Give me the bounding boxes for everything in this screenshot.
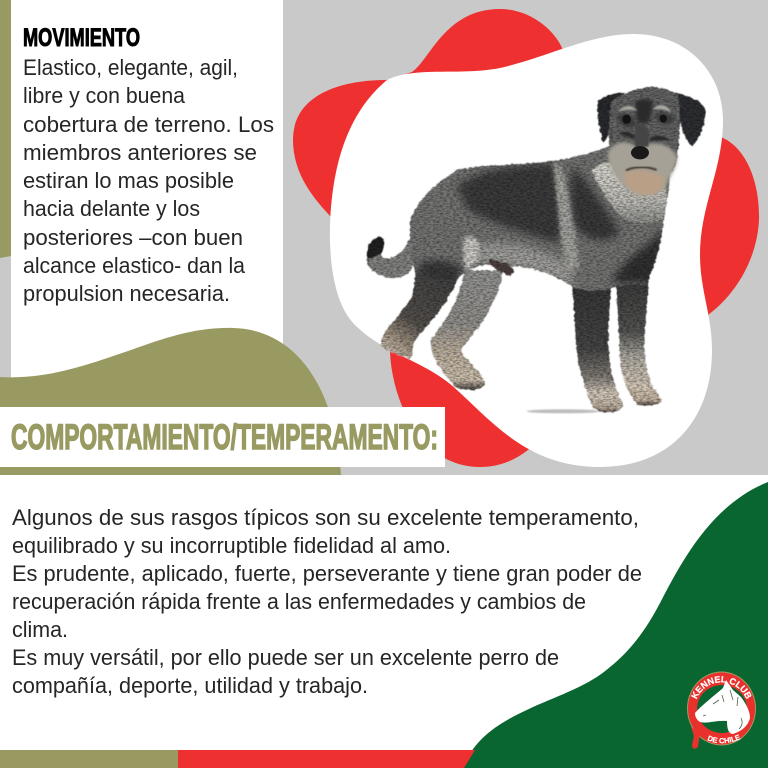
cheek dark bands [618,132,670,141]
belly mid tone [480,242,573,287]
tail tip [367,237,384,258]
temperament text block: clima. [12,617,68,642]
dog fur group [366,87,706,412]
private part [488,260,514,276]
bottom olive bar [0,750,178,768]
movimiento text block: propulsion necesaria. [23,281,230,306]
brows [618,105,671,113]
temperament text block: Es muy versátil, por ello puede ser un excelente perro de [12,645,559,670]
tail [366,230,416,278]
hip light patch [463,236,482,272]
green corner shape [463,482,768,768]
near hind leg [381,260,462,359]
muzzle bridge [635,124,649,147]
movimiento text block [23,55,274,306]
movimiento text block: cobertura de terreno. Los [23,112,274,137]
right ear [675,92,706,147]
temperament text block: recuperación rápida frente a las enfermedades y cambios de [12,589,586,614]
rear thigh dark [415,260,463,290]
panel: movimiento white card [11,0,283,400]
red blob behind dog [293,9,759,467]
comportamiento heading: COMPORTAMIENTO/TEMPERAMENTO: [11,418,438,457]
heading band [0,407,445,467]
logo top lettering: KENNEL CLUB [691,676,752,700]
beard [608,142,677,193]
dog body [410,146,670,291]
movimiento text block: miembros anteriores se [23,140,257,165]
temperament text block: Es prudente, aplicado, fuerte, perseverante y tiene gran poder de [12,561,642,586]
body shading [415,163,665,290]
mouth [626,167,657,171]
movimiento text block: posteriores –con buen [23,225,243,250]
withers light band [553,163,580,273]
panel: bottom white section [0,475,768,768]
movimiento text block: estiran lo mas posible [23,168,234,193]
forehead dark marking [635,99,653,124]
dark saddle patch [457,163,562,243]
temperament text block: Algunos de sus rasgos típicos son su excelente temperamento, [12,505,639,530]
movimiento heading: MOVIMIENTO [23,24,140,52]
movimiento text block: hacia delante y los [23,196,200,221]
eye-side dark [617,112,675,128]
far front leg [615,273,662,406]
nose [631,146,649,159]
logo ribbon [691,727,700,749]
logo bottom lettering: DE CHILE [707,734,741,744]
logo dog details [703,690,742,729]
temperament text block [12,505,642,698]
near front leg [572,283,623,412]
logo white dog head [695,680,750,734]
lower chest dark [612,227,665,283]
temperament text block: compañía, deporte, utilidad y trabajo. [12,673,368,698]
bottom red bar [178,750,475,768]
movimiento text block: alcance elastico- dan la [23,253,245,278]
ground shadow [527,409,600,413]
olive strip on left edge [0,0,11,258]
panel: gray background [0,0,768,475]
beard tan tuft [623,170,664,195]
head [609,87,680,187]
dog photo illustration [366,87,706,413]
chest light fur [592,162,667,224]
temperament text block: equilibrado y su incorruptible fidelidad al amo. [12,533,451,558]
white blob behind dog [330,34,723,467]
far hind leg [430,270,503,390]
eyes [622,115,667,124]
olive wave shape [0,328,341,475]
movimiento text block: Elastico, elegante, agil, [23,55,238,80]
logo: Kennel Club de Chile [687,672,756,749]
movimiento text block: libre y con buena [23,83,185,108]
shoulder dark patch [570,167,620,240]
left ear [597,92,625,143]
